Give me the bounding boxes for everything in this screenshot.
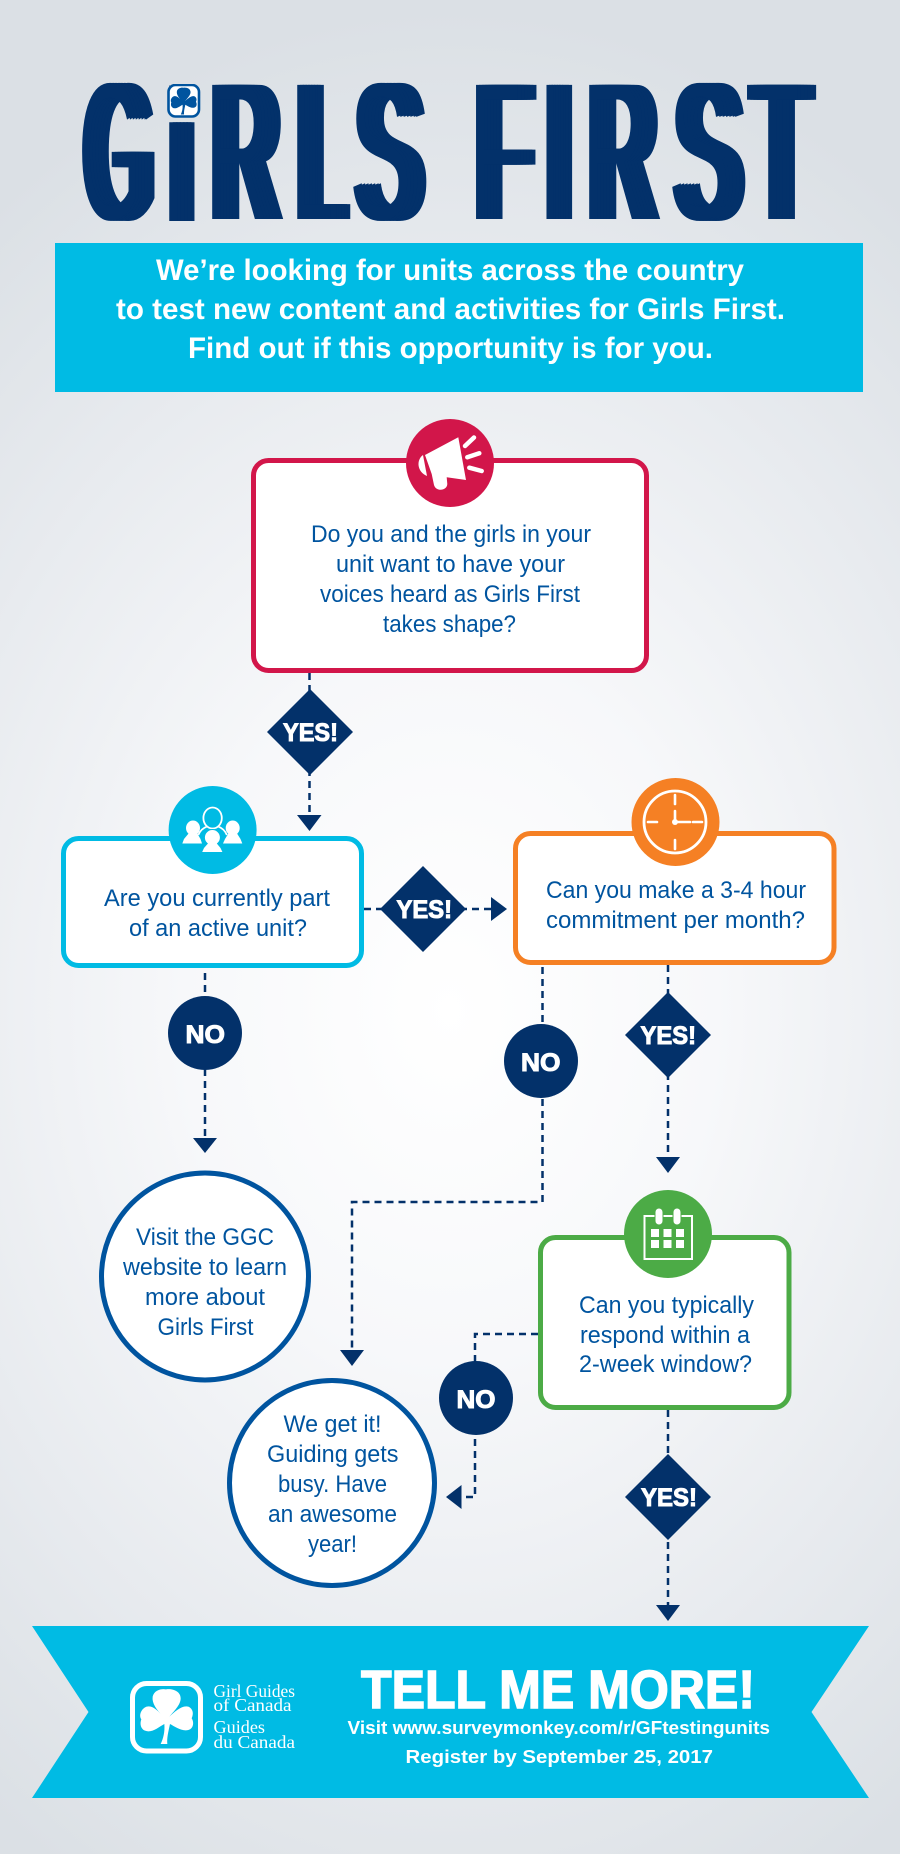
icon: calendar xyxy=(624,1190,712,1278)
question text xyxy=(311,521,591,638)
title: Girls First: S xyxy=(668,43,730,261)
question text: Are you currently part xyxy=(104,885,330,912)
end circle: visit the website: Girls First xyxy=(158,1314,254,1341)
decision: yes 1: YES! xyxy=(283,719,338,747)
call-to-action ribbon xyxy=(32,1626,869,1798)
intro banner: We’re looking for units across the country xyxy=(156,254,744,287)
icon: megaphone xyxy=(406,419,494,507)
icon: people xyxy=(169,786,257,874)
decision: yes 3 xyxy=(625,992,711,1078)
end circle: visit the website xyxy=(102,1173,308,1380)
title: Girls First: L xyxy=(291,43,333,261)
end circle: visit the website: website to learn xyxy=(122,1254,287,1281)
title: Girls First: R xyxy=(582,43,645,261)
arrow: first question to active unit question xyxy=(297,673,322,831)
arrow: active unit yes to commitment xyxy=(364,897,507,921)
end circle: we get it: busy. Have xyxy=(278,1471,387,1498)
end circle: visit the website: Visit the GGC xyxy=(136,1224,274,1251)
arrow: commitment yes xyxy=(656,965,680,1173)
title: Girls First: R xyxy=(205,43,268,261)
heading: tell me more: TELL ME MORE! xyxy=(361,1660,755,1720)
panel: question 2 xyxy=(64,786,362,966)
logo: Girl Guides of Canada: of Canada xyxy=(214,1695,292,1715)
question text xyxy=(104,885,330,942)
end circle: we get it: We get it! xyxy=(284,1411,382,1438)
question text: 2-week window? xyxy=(579,1351,752,1378)
decision: yes 2 xyxy=(380,866,466,952)
question text: respond within a xyxy=(580,1322,751,1349)
title: Girls First: T xyxy=(745,43,800,261)
arrow: respond no xyxy=(446,1334,538,1509)
question text xyxy=(579,1292,754,1378)
end circle: we get it: an awesome xyxy=(268,1501,397,1528)
title: Girls First: G xyxy=(78,43,142,261)
icon: clock xyxy=(632,778,720,866)
question text: unit want to have your xyxy=(336,551,565,578)
question text xyxy=(546,877,806,934)
intro banner: to test new content and activities for Girls First. xyxy=(116,293,785,326)
question text: Can you make a 3-4 hour xyxy=(546,877,806,904)
arrow: respond yes xyxy=(656,1410,680,1621)
decision: no 3: NO xyxy=(456,1386,496,1414)
decision: yes 2: YES! xyxy=(396,896,452,924)
decision: yes 4: YES! xyxy=(641,1484,697,1512)
logo: Girl Guides of Canada: Guides xyxy=(214,1717,265,1737)
end circle: we get it xyxy=(230,1380,434,1586)
question text: Can you typically xyxy=(579,1292,754,1319)
register link: Visit www.surveymonkey.com/r/GFtestingunits xyxy=(348,1717,770,1738)
question text: takes shape? xyxy=(383,611,516,638)
intro banner: Find out if this opportunity is for you. xyxy=(188,332,713,365)
register deadline: Register by September 25, 2017 xyxy=(406,1746,713,1767)
decision: yes 1 xyxy=(267,689,353,775)
end circle: visit the website: more about xyxy=(145,1284,265,1311)
decision: no 2 xyxy=(504,1024,578,1098)
title: Girls First: S xyxy=(349,43,411,261)
decision: no 3 xyxy=(439,1361,513,1435)
title: Girls First: I xyxy=(540,43,560,261)
question text: of an active unit? xyxy=(129,915,307,942)
title: Girls First: i xyxy=(163,52,184,261)
arrow: active unit no xyxy=(193,973,217,1153)
panel: question 4 xyxy=(540,1190,789,1408)
end circle: we get it: year! xyxy=(308,1531,357,1558)
intro banner xyxy=(55,243,863,392)
decision: yes 4 xyxy=(625,1454,711,1540)
logo: Girl Guides of Canada: du Canada xyxy=(214,1732,295,1752)
icon: trefoil in the i xyxy=(167,84,200,118)
title: Girls First xyxy=(78,43,816,261)
logo: Girl Guides of Canada xyxy=(132,1681,295,1752)
decision: no 1 xyxy=(168,996,242,1070)
question text: commitment per month? xyxy=(546,907,805,934)
question text: voices heard as Girls First xyxy=(320,581,580,608)
decision: no 1: NO xyxy=(186,1021,225,1049)
end circle: we get it: Guiding gets xyxy=(267,1441,398,1468)
logo: Girl Guides of Canada: Girl Guides xyxy=(214,1681,295,1701)
decision: no 2: NO xyxy=(521,1049,560,1077)
panel: question 3 xyxy=(516,778,834,962)
question text: Do you and the girls in your xyxy=(311,521,591,548)
arrow: commitment no xyxy=(340,967,542,1366)
panel: question 1 xyxy=(254,419,646,670)
decision: yes 3: YES! xyxy=(640,1022,696,1050)
title: Girls First: F xyxy=(469,43,521,261)
